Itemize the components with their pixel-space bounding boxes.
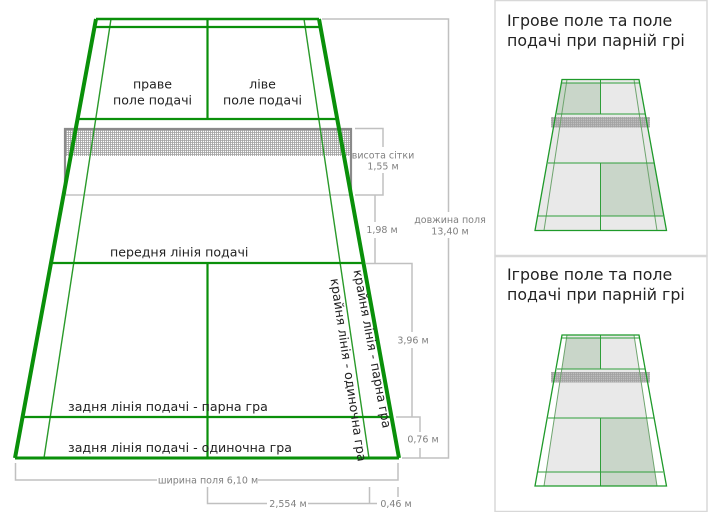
label: doubles side line: крайня лінія - парна гра — [351, 268, 395, 429]
dimension: net height: 1,55 м — [367, 162, 399, 172]
dimension: 0.46 m: 0,46 м — [380, 499, 412, 510]
label: right service court line 2: поле подачі — [113, 92, 192, 108]
dimension: court length: довжина поля — [414, 215, 486, 226]
dimension: court length: 13,40 м — [431, 226, 469, 238]
panel: doubles court diagram, bottom — [495, 256, 707, 512]
dimension: 2.554 m: 2,554 м — [269, 499, 307, 510]
panel title — [507, 265, 685, 304]
dimension: net height: висота сітки — [352, 150, 414, 162]
panel title: Ігрове поле та поле — [507, 265, 672, 284]
label: left service court line 2: поле подачі — [223, 92, 302, 108]
panel title — [507, 11, 685, 50]
court lines — [15, 19, 399, 458]
panel: main court diagram — [15, 19, 399, 462]
panel title: подачі при парній грі — [507, 31, 685, 50]
net — [65, 129, 351, 195]
panel title: Ігрове поле та поле — [507, 11, 672, 30]
label: singles back service line: задня лінія подачі - одиночна гра — [68, 440, 292, 455]
panel: doubles court diagram, top — [495, 0, 707, 256]
small court — [535, 80, 666, 230]
small court — [535, 335, 666, 486]
dimension: 0.76 m: 0,76 м — [407, 434, 439, 446]
label: right service court: праве — [133, 76, 172, 92]
label: left service court: ліве — [249, 76, 276, 92]
dimension lines — [16, 19, 448, 504]
panel title: подачі при парній грі — [507, 285, 685, 304]
dimension: net height — [352, 150, 414, 172]
dimension: court length — [414, 215, 486, 238]
dimension: 1.98 m: 1,98 м — [366, 225, 398, 236]
dimension: 3.96 m: 3,96 м — [397, 336, 429, 346]
label: singles side line: крайня лінія - одиночна гра — [328, 277, 370, 462]
dimension: court width: ширина поля 6,10 м — [158, 476, 258, 486]
label: front service line: передня лінія подачі — [110, 244, 248, 260]
label: doubles back service line: задня лінія подачі - парна гра — [68, 399, 268, 414]
